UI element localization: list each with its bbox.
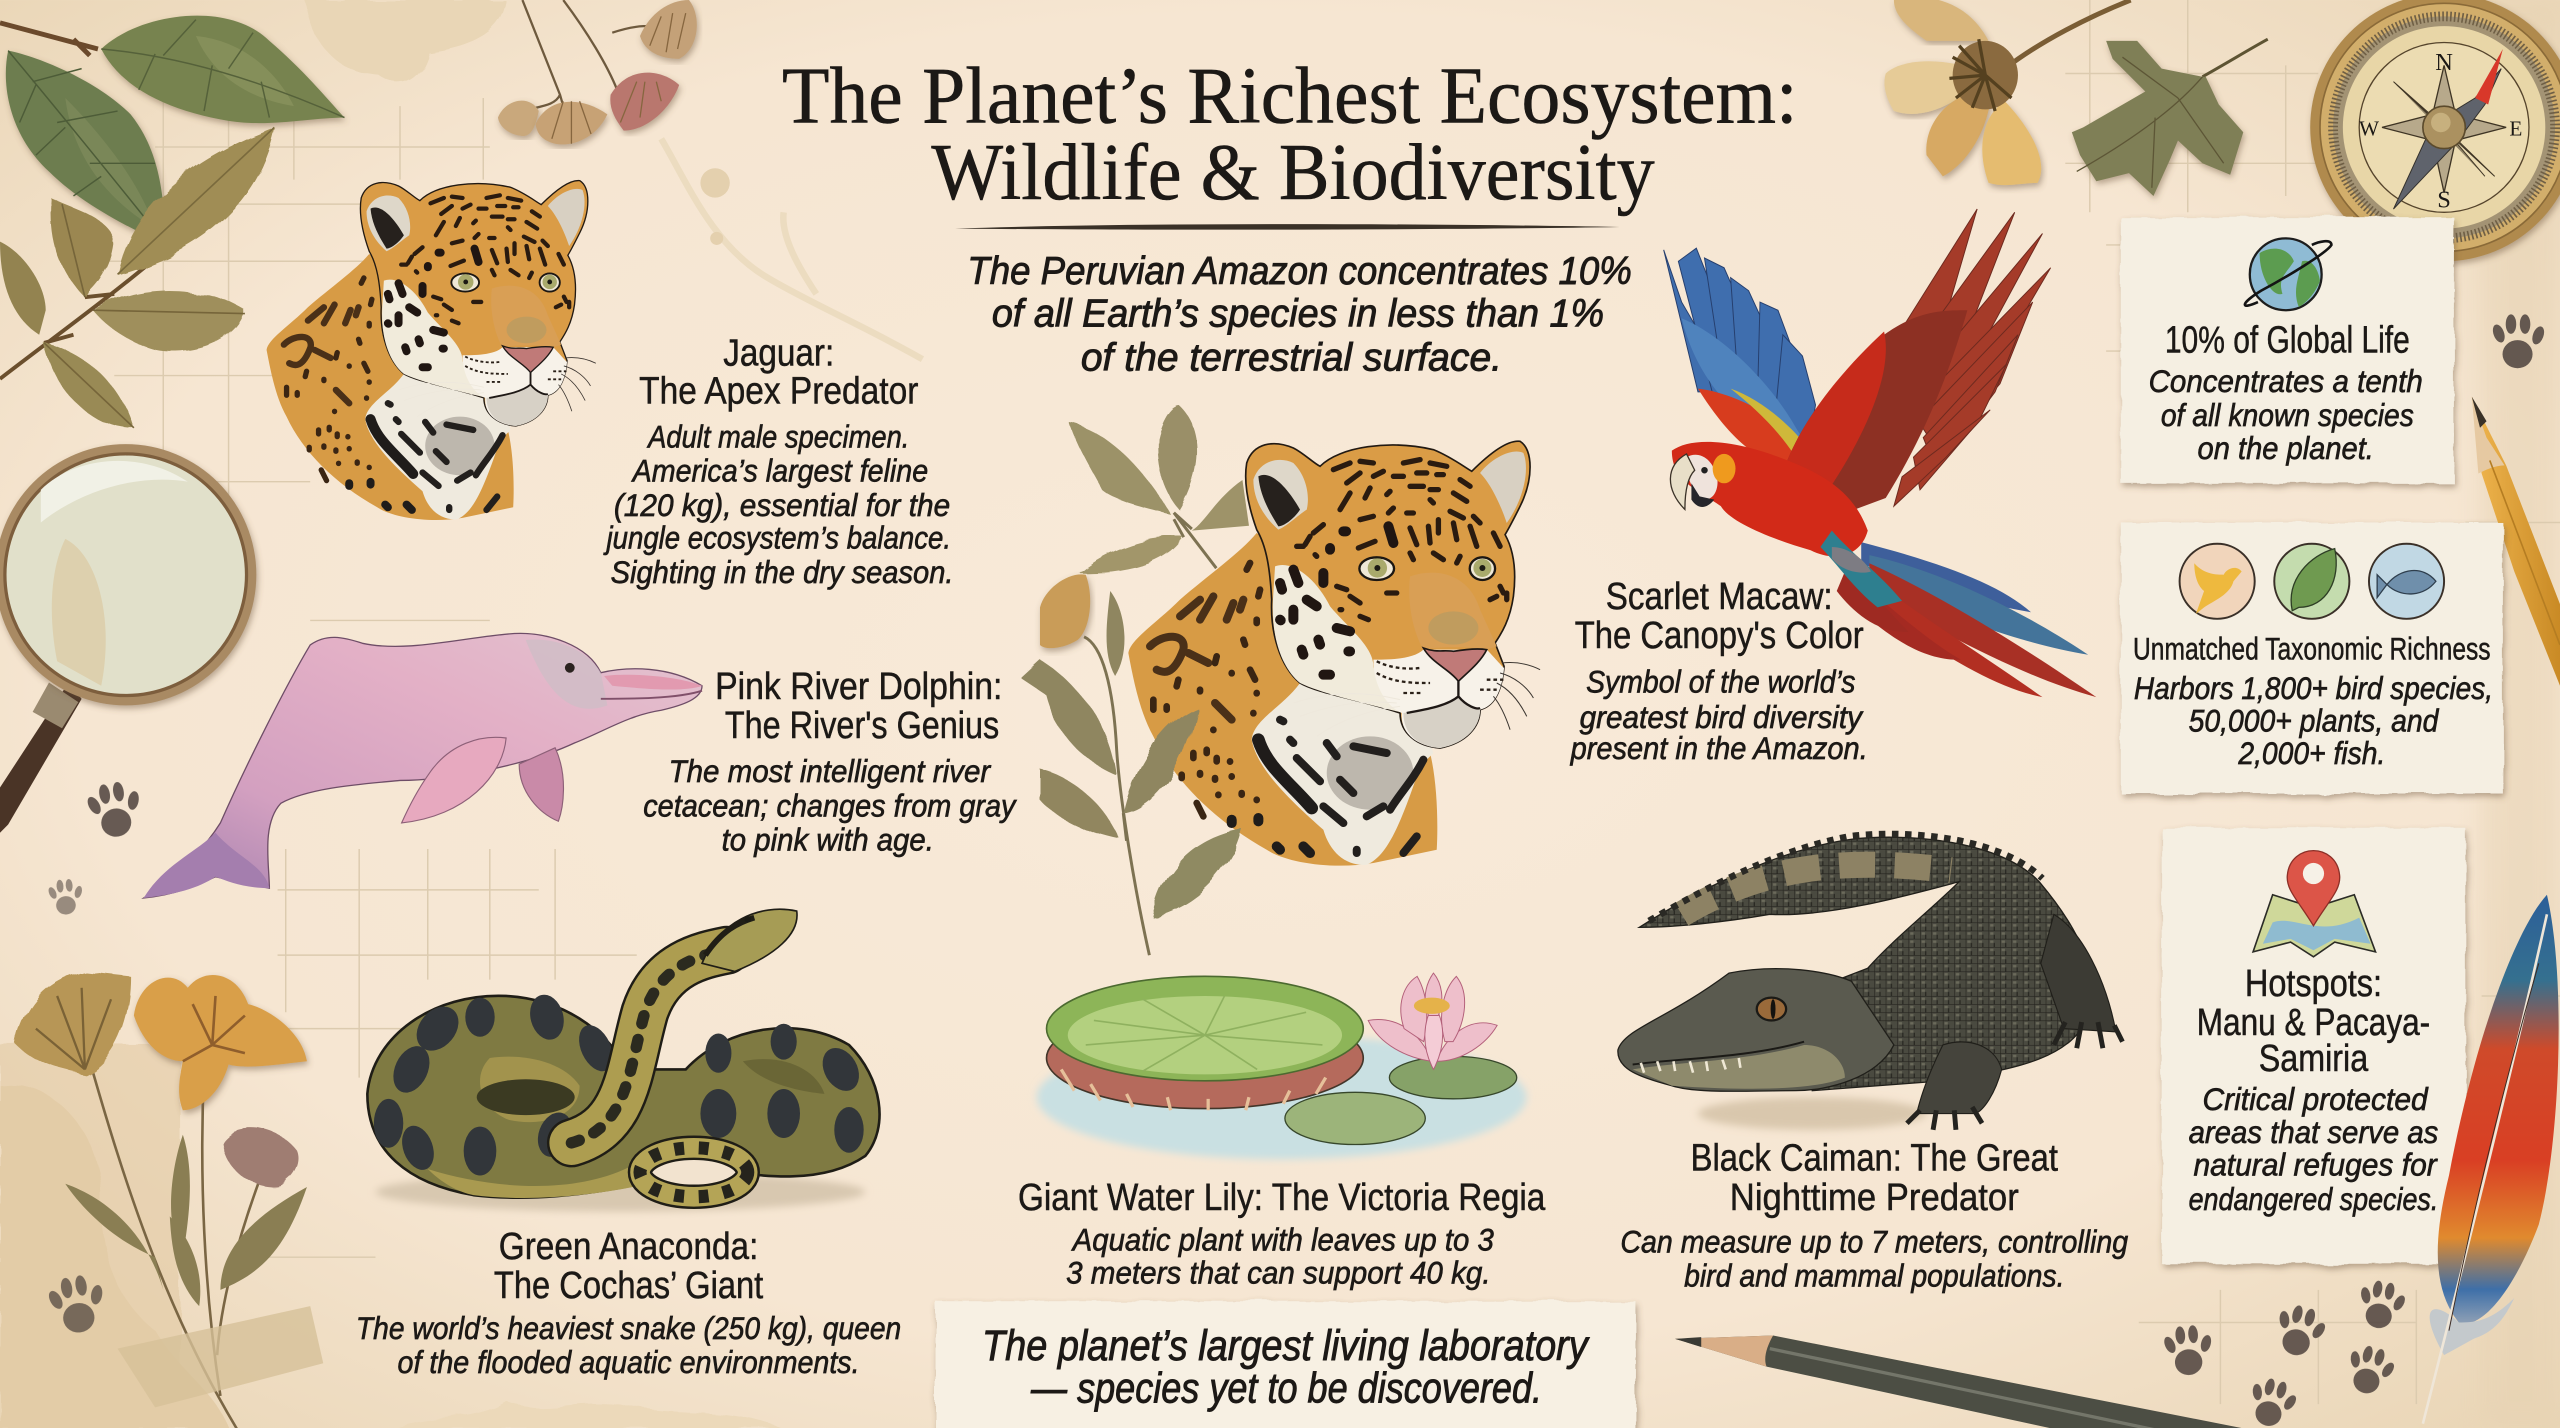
compass: N bbox=[2435, 49, 2453, 76]
scarlet macaw label: The Canopy's Color bbox=[1575, 614, 1864, 656]
icon: bird bbox=[2180, 544, 2255, 619]
giant water lily label: Aquatic plant with leaves up to 3 bbox=[1071, 1223, 1494, 1258]
illustration: scarlet macaw bbox=[1664, 209, 2096, 697]
dried flower top right bbox=[1884, 0, 2131, 185]
illustration: large jaguar bbox=[1128, 441, 1540, 866]
info card: global life: Concentrates a tenth bbox=[2149, 364, 2423, 399]
subtitle bbox=[967, 250, 1632, 380]
closing note: The planet’s largest living laboratory bbox=[982, 1322, 1590, 1369]
black caiman label: bird and mammal populations. bbox=[1684, 1259, 2064, 1294]
info card: taxonomic richness bbox=[2121, 522, 2503, 794]
pressed wildflowers bottom left bbox=[16, 971, 307, 1428]
jaguar label: (120 kg), essential for the bbox=[614, 488, 950, 523]
giant water lily label bbox=[1018, 1176, 1545, 1290]
sprig leaves over jaguar bbox=[1123, 707, 1242, 918]
scarlet macaw label: present in the Amazon. bbox=[1570, 731, 1868, 766]
closing note: — species yet to be discovered. bbox=[1030, 1364, 1542, 1411]
jaguar label: jungle ecosystem’s balance. bbox=[603, 521, 951, 556]
botanical sprig behind large jaguar bbox=[1020, 405, 1249, 955]
illustration: small jaguar bbox=[267, 181, 596, 520]
illustration: pink river dolphin label: cetacean; changes from gray bbox=[643, 788, 1018, 823]
info card: global life: 10% of Global Life bbox=[2165, 319, 2410, 361]
info card: global life: on the planet. bbox=[2198, 431, 2374, 466]
orange pencil bbox=[2472, 397, 2560, 686]
info card: global life: of all known species bbox=[2161, 398, 2414, 433]
pressed oak leaf top right bbox=[2072, 39, 2268, 196]
black caiman label bbox=[1620, 1137, 2128, 1294]
jaguar label: Jaguar: bbox=[723, 332, 834, 374]
title underline stroke bbox=[955, 224, 1620, 230]
subtitle: The Peruvian Amazon concentrates 10% bbox=[967, 250, 1632, 293]
dark pencil bbox=[1675, 1336, 2286, 1428]
pressed leaves top left bbox=[0, 16, 344, 428]
compass: E bbox=[2509, 117, 2522, 141]
black caiman label: Black Caiman: The Great bbox=[1691, 1137, 2058, 1179]
green anaconda label: Green Anaconda: bbox=[499, 1225, 758, 1267]
subtitle: of all Earth’s species in less than 1% bbox=[992, 293, 1604, 336]
illustration: giant water lily bbox=[1037, 973, 1527, 1159]
black caiman label: Can measure up to 7 meters, controlling bbox=[1620, 1224, 2128, 1259]
info card: hotspots: areas that serve as bbox=[2189, 1115, 2438, 1150]
scarlet macaw label: Symbol of the world’s bbox=[1586, 664, 1856, 699]
illustration: green anaconda bbox=[367, 909, 880, 1211]
title: Wildlife & Biodiversity bbox=[931, 129, 1655, 217]
green anaconda label: The world’s heaviest snake (250 kg), queen bbox=[356, 1311, 901, 1346]
feather bbox=[2423, 895, 2559, 1424]
subtitle: of the terrestrial surface. bbox=[1081, 337, 1502, 380]
closing note bbox=[936, 1301, 1636, 1428]
illustration: pink river dolphin bbox=[144, 633, 702, 898]
giant water lily label: 3 meters that can support 40 kg. bbox=[1066, 1255, 1491, 1290]
masking tape bbox=[118, 1306, 323, 1407]
info card: taxonomic richness: 50,000+ plants, and bbox=[2189, 703, 2440, 738]
info card: global life bbox=[2121, 217, 2454, 483]
compass bbox=[2310, 0, 2560, 261]
paw print bbox=[2491, 314, 2546, 368]
icon: fish bbox=[2369, 544, 2444, 619]
green anaconda label: The Cochas’ Giant bbox=[494, 1264, 764, 1306]
info card: hotspots: Manu & Pacaya- bbox=[2197, 1001, 2430, 1043]
icon: leaf bbox=[2274, 544, 2349, 619]
compass: W bbox=[2359, 117, 2379, 141]
icon: globe bbox=[2245, 238, 2331, 310]
scarlet macaw label bbox=[1570, 575, 1868, 766]
green anaconda label bbox=[356, 1225, 901, 1380]
illustration: pink river dolphin label: The River's Genius bbox=[725, 704, 999, 746]
illustration: black caiman bbox=[1618, 834, 2122, 1130]
scarlet macaw label: Scarlet Macaw: bbox=[1606, 575, 1833, 617]
info card: taxonomic richness: Harbors 1,800+ bird species, bbox=[2134, 671, 2493, 706]
illustration: pink river dolphin label: to pink with age. bbox=[722, 823, 934, 858]
icon: map pin bbox=[2253, 851, 2376, 957]
title: The Planet’s Richest Ecosystem: bbox=[782, 52, 1798, 140]
jaguar label: America’s largest feline bbox=[631, 454, 928, 489]
dried flowers top bbox=[498, 0, 697, 144]
jaguar label: Adult male specimen. bbox=[646, 419, 909, 454]
info card: hotspots: Hotspots: bbox=[2245, 962, 2382, 1004]
info card: hotspots: Critical protected bbox=[2202, 1082, 2429, 1117]
info card: taxonomic richness: 2,000+ fish. bbox=[2237, 736, 2385, 771]
title bbox=[782, 52, 1798, 217]
magnifying glass bbox=[0, 444, 256, 841]
jaguar label bbox=[603, 332, 953, 590]
jaguar label: Sighting in the dry season. bbox=[611, 555, 953, 590]
illustration: pink river dolphin label bbox=[643, 665, 1018, 858]
illustration: pink river dolphin label: The most intelligent river bbox=[669, 754, 992, 789]
info card: hotspots bbox=[2162, 828, 2465, 1264]
info card: hotspots: natural refuges for bbox=[2193, 1148, 2438, 1183]
green anaconda label: of the flooded aquatic environments. bbox=[398, 1345, 860, 1380]
black caiman label: Nighttime Predator bbox=[1730, 1176, 2019, 1218]
scarlet macaw label: greatest bird diversity bbox=[1580, 700, 1864, 735]
compass: S bbox=[2437, 186, 2451, 213]
info card: hotspots: Samiria bbox=[2259, 1037, 2368, 1079]
illustration: pink river dolphin label: Pink River Dolphin: bbox=[715, 665, 1002, 707]
jaguar label: The Apex Predator bbox=[639, 369, 918, 411]
info card: hotspots: endangered species. bbox=[2189, 1182, 2438, 1217]
paw prints bbox=[44, 778, 2409, 1428]
giant water lily label: Giant Water Lily: The Victoria Regia bbox=[1018, 1176, 1545, 1218]
